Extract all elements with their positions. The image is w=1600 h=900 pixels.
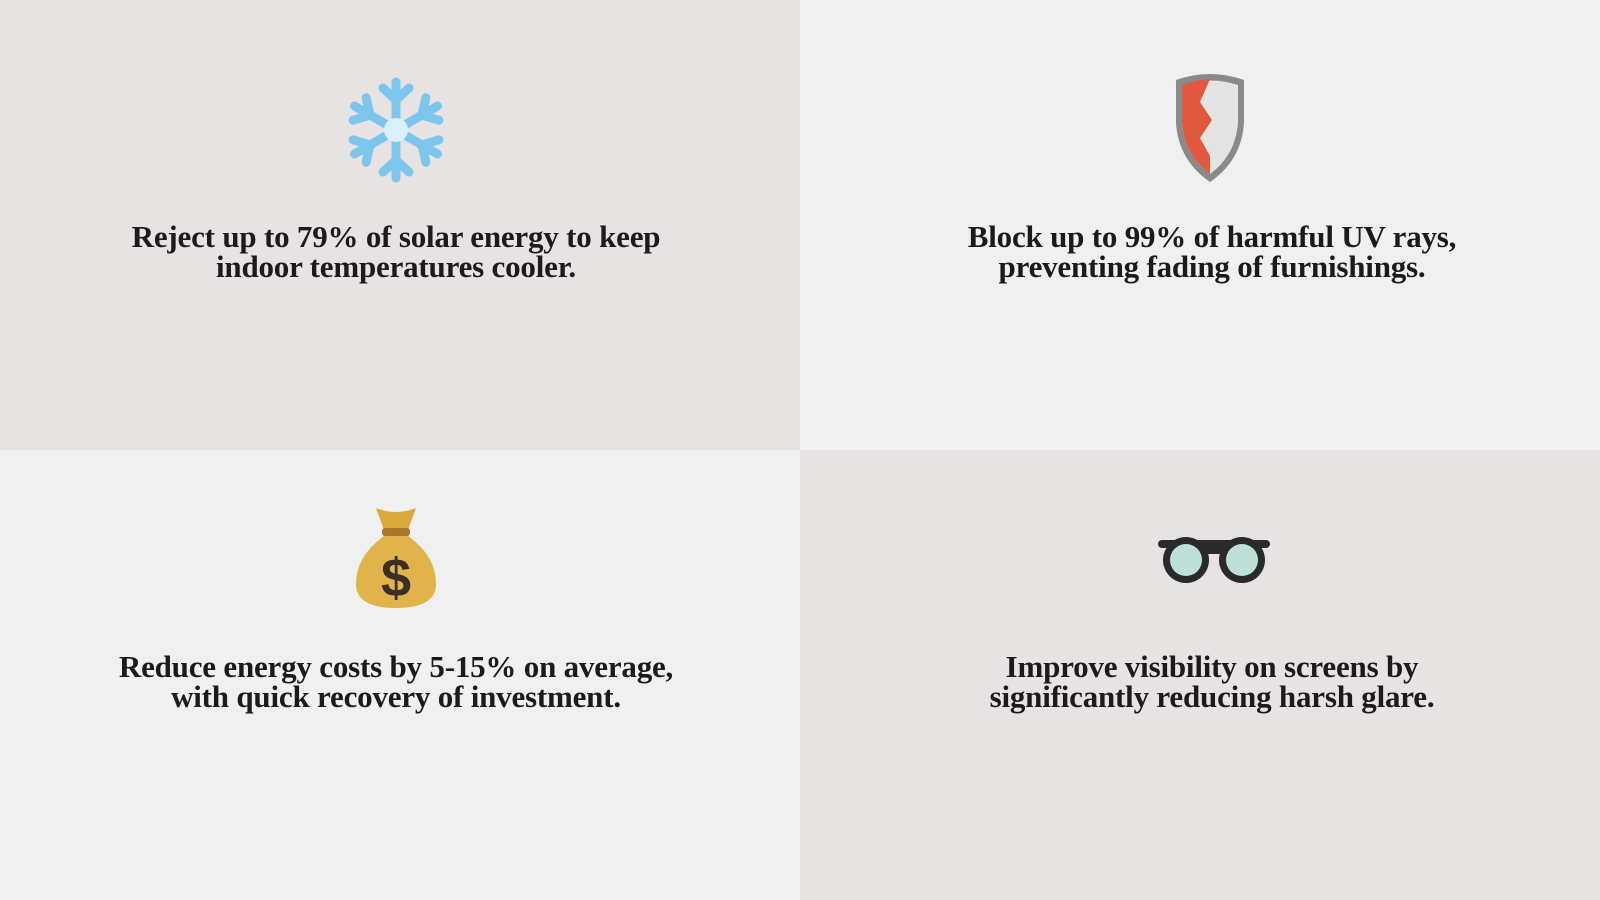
panel: energy costs <box>0 450 800 900</box>
text: solar energy: indoor temperatures cooler. <box>216 249 576 284</box>
text: solar energy <box>132 219 660 284</box>
text: UV protection: Block up to 99% of harmful UV rays, <box>968 219 1456 254</box>
text: energy costs <box>119 649 673 714</box>
text: energy costs: with quick recovery of investment. <box>171 679 621 714</box>
icon: snowflake <box>348 78 444 182</box>
icon: money bag: $ <box>381 548 411 608</box>
icon: money bag <box>356 508 436 608</box>
panel: glare reduction <box>800 450 1600 900</box>
text: UV protection <box>968 219 1456 284</box>
text: energy costs: Reduce energy costs by 5-15% on average, <box>119 649 673 684</box>
icon: shield <box>1176 74 1244 182</box>
text: glare reduction: Improve visibility on screens by <box>1006 649 1418 684</box>
panel: UV protection <box>800 0 1600 450</box>
text: glare reduction <box>990 649 1434 714</box>
text: glare reduction: significantly reducing harsh glare. <box>990 679 1434 714</box>
panel: solar energy <box>0 0 800 450</box>
text: UV protection: preventing fading of furnishings. <box>999 249 1425 284</box>
text: solar energy: Reject up to 79% of solar energy to keep <box>132 219 660 254</box>
icon: sunglasses <box>1158 537 1270 583</box>
